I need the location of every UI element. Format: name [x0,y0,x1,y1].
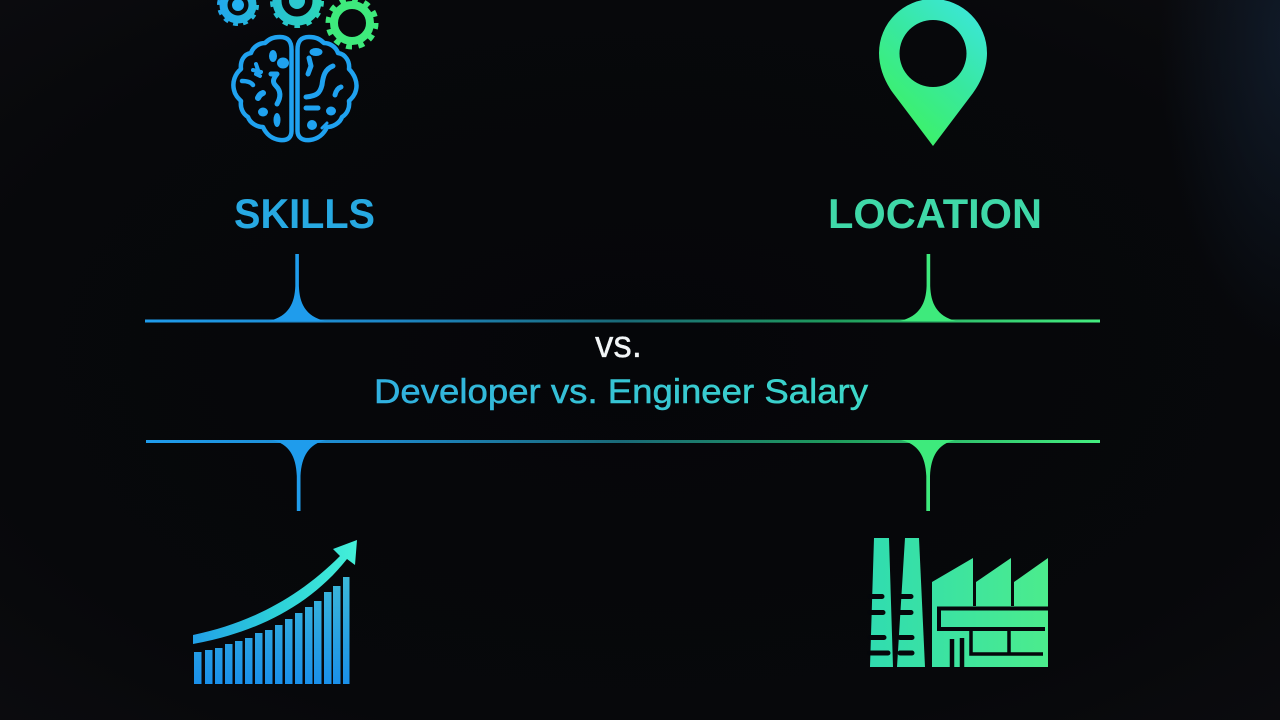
chart: rising bars with arrow [193,540,357,684]
building window lines [939,608,1050,668]
chimney slits [870,596,912,653]
bottom divider with drops [146,440,1100,511]
icon: factory [870,538,1050,668]
heading: location: LOCATION [828,190,1042,237]
folds [242,81,253,85]
arrow [193,540,357,644]
heading: skills: SKILLS [234,190,375,237]
left lobe outline [233,37,292,140]
icon: brain [233,37,357,140]
label: vs.: vs. [595,324,642,366]
right lobe outline [298,37,357,140]
icon: brain detail blobs [258,48,336,130]
chimneys [870,538,893,667]
building [932,558,1048,667]
icon: middle teal gear [272,0,322,26]
bars [194,577,350,684]
icon: small blue gear [219,0,257,24]
icon: location pin [879,0,987,146]
top divider with peaks [145,254,1100,322]
title: Developer vs. Engineer Salary: Developer vs. Engineer Salary [374,373,868,411]
icon: brain with gears [219,0,376,140]
icon: green gear [328,0,376,47]
